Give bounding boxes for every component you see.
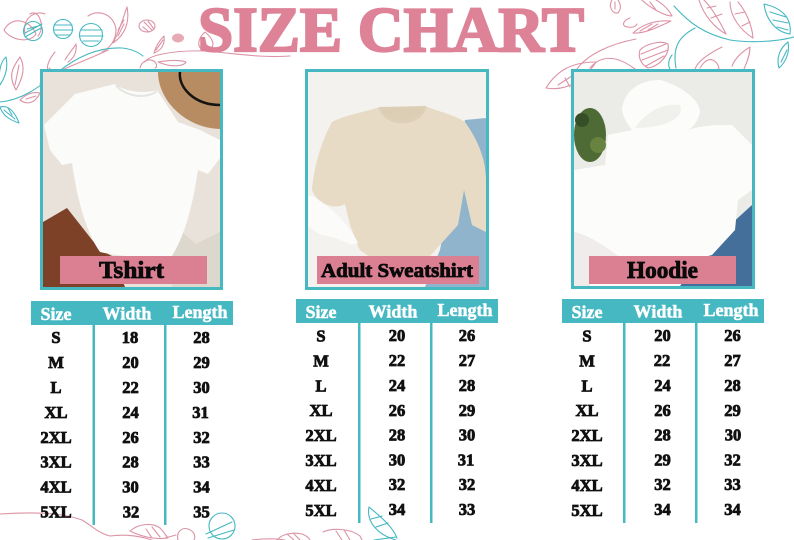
table rows: tshirt: 30: [193, 378, 210, 397]
label: hoodie: Hoodie: [627, 258, 698, 284]
table header: tshirt: [31, 301, 233, 325]
decoration: top-right floral vine: [546, 0, 794, 89]
table rows: sweatshirt: XL: [310, 401, 332, 420]
table rows: sweatshirt: 33: [459, 500, 475, 519]
table rows: sweatshirt: S: [316, 326, 326, 346]
table rows: tshirt: 28: [193, 328, 210, 347]
photo: dried flowers: [172, 232, 220, 287]
table rows: tshirt: 35: [193, 502, 210, 522]
table rows: tshirt: XL: [45, 403, 67, 422]
table rows: tshirt: 24: [122, 403, 139, 422]
table rows: sweatshirt: 2XL: [305, 426, 337, 445]
table header: tshirt: Size: [40, 304, 72, 324]
table rows: tshirt: 20: [122, 353, 139, 372]
table rows: hoodie: M: [579, 352, 595, 370]
panel: hoodie photo: [572, 70, 754, 288]
table rows: hoodie: 29: [724, 401, 741, 420]
panel: sweatshirt photo: [306, 70, 488, 288]
panel: tshirt photo: [42, 70, 222, 288]
table rows: hoodie: 27: [724, 351, 741, 370]
table rows: tshirt: 4XL: [40, 478, 72, 496]
table rows: sweatshirt: 32: [389, 475, 405, 494]
photo: white hoodie: [574, 80, 752, 286]
table header: hoodie: Width: [634, 302, 682, 322]
table rows: hoodie: 30: [725, 426, 741, 444]
table: tshirt sizes: [31, 301, 233, 525]
table rows: tshirt: [40, 328, 210, 522]
table rows: hoodie: 20: [654, 326, 671, 345]
table rows: sweatshirt: 4XL: [305, 476, 337, 495]
table rows: sweatshirt: M: [313, 352, 329, 370]
table rows: hoodie: 4XL: [571, 476, 603, 495]
table rows: tshirt: 26: [122, 428, 139, 447]
table header: sweatshirt: Length: [437, 300, 493, 320]
table rows: hoodie: 33: [724, 475, 741, 494]
table rows: sweatshirt: 27: [459, 351, 475, 370]
table header: tshirt: Width: [103, 304, 151, 324]
table rows: sweatshirt: 24: [389, 376, 405, 395]
table rows: sweatshirt: L: [315, 376, 327, 396]
table rows: hoodie: 5XL: [571, 501, 603, 520]
table rows: tshirt: S: [51, 328, 61, 347]
table rows: tshirt: 33: [193, 452, 210, 472]
table rows: tshirt: 28: [122, 452, 139, 472]
table rows: sweatshirt: 30: [389, 450, 405, 470]
table rows: hoodie: S: [582, 326, 592, 346]
table rows: hoodie: 29: [654, 450, 671, 470]
photo: white t-shirt: [44, 84, 220, 257]
table rows: sweatshirt: 31: [458, 450, 474, 470]
table: adult sweatshirt sizes: [296, 299, 498, 523]
table rows: sweatshirt: 28: [389, 426, 405, 444]
table rows: sweatshirt: 26: [459, 326, 475, 345]
table header: hoodie: Length: [703, 300, 759, 320]
table rows: hoodie: 28: [654, 426, 671, 444]
photo: sneaker: [574, 232, 618, 286]
table rows: tshirt: 32: [123, 502, 139, 522]
table header: sweatshirt: [296, 299, 498, 323]
table rows: tshirt: 31: [192, 403, 209, 422]
photo: sweatshirt: [312, 106, 486, 256]
decoration: top-left floral vine: [0, 7, 290, 123]
table rows: hoodie: 2XL: [571, 426, 603, 445]
label: adult sweatshirt: Adult Sweatshirt: [321, 260, 473, 282]
table rows: hoodie: [571, 326, 741, 520]
table rows: sweatshirt: 26: [389, 401, 405, 420]
table rows: hoodie: 26: [724, 326, 741, 345]
table rows: hoodie: 34: [724, 500, 741, 519]
table rows: hoodie: 34: [654, 500, 671, 519]
table rows: sweatshirt: 5XL: [305, 501, 337, 520]
label: tshirt: Tshirt: [99, 258, 164, 284]
table rows: sweatshirt: 34: [389, 500, 405, 519]
table rows: sweatshirt: 22: [389, 351, 405, 370]
table rows: hoodie: 3XL: [571, 451, 603, 470]
table rows: sweatshirt: [305, 326, 475, 520]
table rows: tshirt: 18: [122, 328, 138, 347]
table rows: sweatshirt: 30: [459, 426, 475, 444]
table rows: hoodie: 22: [654, 351, 670, 370]
photo: white sneakers: [308, 195, 358, 245]
label: hoodie: [589, 256, 736, 284]
table rows: tshirt: 30: [122, 478, 139, 496]
table rows: sweatshirt: 20: [389, 326, 405, 345]
table rows: hoodie: 24: [654, 376, 671, 395]
table rows: hoodie: 28: [724, 376, 741, 395]
table rows: tshirt: 22: [122, 378, 139, 397]
table rows: hoodie: XL: [576, 401, 598, 420]
photo: blue jeans: [425, 118, 486, 287]
table rows: tshirt: 3XL: [40, 452, 72, 472]
photo: straw hat: [158, 72, 220, 129]
table rows: sweatshirt: 32: [459, 475, 475, 494]
table rows: tshirt: 29: [193, 353, 210, 372]
decoration: bottom floral vine: [0, 507, 397, 540]
table rows: tshirt: 34: [193, 478, 210, 496]
table rows: tshirt: 5XL: [40, 502, 72, 522]
table header: hoodie: [562, 299, 764, 323]
table header: sweatshirt: Width: [369, 302, 417, 322]
photo: green plant: [574, 108, 606, 162]
table rows: tshirt: 2XL: [40, 428, 72, 447]
table header: tshirt: Length: [172, 302, 228, 322]
table header: sweatshirt: Size: [306, 302, 337, 322]
table rows: sweatshirt: 3XL: [305, 451, 337, 470]
label: tshirt: [60, 256, 207, 284]
table rows: tshirt: L: [50, 378, 62, 397]
table rows: hoodie: 26: [654, 401, 671, 420]
table rows: tshirt: M: [48, 353, 64, 372]
table rows: tshirt: 32: [193, 428, 210, 447]
photo: brown skirt: [43, 208, 125, 287]
table: hoodie sizes: [562, 299, 764, 523]
table rows: hoodie: L: [581, 376, 593, 396]
table header: hoodie: Size: [572, 302, 603, 322]
table rows: sweatshirt: 29: [459, 401, 475, 420]
photo: denim jeans: [680, 205, 752, 286]
table rows: sweatshirt: 28: [459, 376, 475, 395]
table rows: hoodie: 32: [724, 450, 741, 470]
table rows: hoodie: 32: [654, 475, 671, 494]
